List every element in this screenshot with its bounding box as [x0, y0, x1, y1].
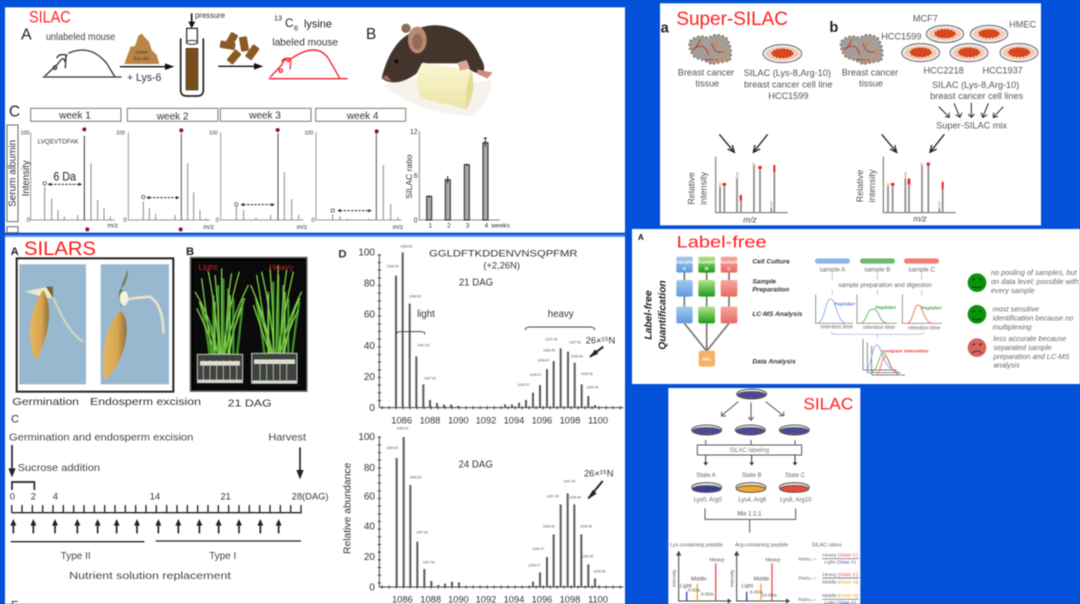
bar chart: SILAC ratio: 0	[414, 218, 418, 225]
SILAC ratio formulas: Middle (State B)	[822, 593, 858, 599]
rotated title: Label-free Quantification: Label-free	[644, 290, 655, 340]
photo captions	[12, 397, 272, 409]
pros and cons text: separated sample	[993, 343, 1052, 352]
photo captions: Germination	[12, 397, 79, 408]
heading: Label-free: Label-free	[677, 233, 767, 252]
unlabeled mouse: unlabeled mouse	[46, 32, 115, 43]
spectrum 24 DAG: 1096.96	[543, 525, 555, 529]
spectrum 21 DAG: 1097.96	[569, 340, 581, 344]
week header boxes	[31, 108, 406, 122]
spectrum 21 DAG: 100	[358, 248, 375, 259]
unlabeled dishes	[692, 389, 809, 435]
row label: Serum albumin	[7, 125, 19, 233]
split arrows	[722, 402, 784, 420]
spectrum b: m/z	[913, 214, 928, 224]
column titles: SILAC ratios	[812, 542, 842, 548]
spectrum week 1: Intensity	[21, 160, 32, 196]
spectrum week 4	[304, 129, 403, 231]
spectrum 21 DAG: 1098.96	[581, 372, 593, 376]
week header boxes: week 1	[58, 111, 91, 122]
Arg chart: 10.0Da	[762, 593, 777, 598]
Lys chart: Light	[680, 584, 692, 590]
pros and cons text: no pooling of samples, but	[991, 268, 1078, 277]
spectrum 24 DAG: 1096.47	[532, 547, 544, 551]
spectrum 24 DAG: 1098.46	[569, 495, 581, 499]
Lys chart: 4.0Da	[688, 588, 701, 593]
spectrum b: Relative	[855, 170, 865, 202]
spectrum week 1: 6 Da	[53, 171, 76, 184]
13C6 lysine label: 13	[274, 14, 282, 23]
sample discs: sample preparation and digestion	[838, 282, 932, 289]
sample labels: Breast cancer	[842, 68, 898, 78]
SILAC ratio formulas	[798, 552, 859, 604]
bar chart: SILAC ratio: SILAC ratio	[404, 154, 414, 199]
SILAC labeling box: SILAC labeling	[730, 448, 769, 454]
spectrum 24 DAG: 1098.96	[580, 525, 592, 529]
Lys chart: Heavy	[709, 558, 725, 564]
spectrum 24 DAG: 1086.00	[396, 426, 408, 430]
Lys chart: Middle	[691, 576, 707, 582]
panel label C: C	[9, 104, 20, 121]
timeline chart: Type II	[61, 551, 91, 562]
spectrum 21 DAG: 1087.00	[417, 344, 429, 348]
week header boxes: week 3	[248, 111, 281, 122]
spectrum week 2: m/z	[203, 224, 214, 231]
panel label A: A	[638, 233, 644, 242]
SILAC ratio formulas: Ratio₂ =	[798, 575, 816, 581]
panel label B: B	[366, 26, 376, 43]
spectrum 24 DAG: 40	[364, 522, 375, 533]
column titles	[670, 542, 842, 548]
spectrum 21 DAG: 1092	[476, 415, 496, 425]
13C6 lysine label: 6	[294, 24, 298, 33]
spectrum 21 DAG: 1096.47	[538, 359, 550, 363]
sample labels: breast cancer cell lines	[930, 91, 1024, 101]
spectrum a: Relative	[687, 172, 697, 205]
bar chart: SILAC ratio: 3	[466, 223, 470, 230]
panel label A: A	[11, 246, 19, 258]
sample labels: Breast cancer	[678, 68, 734, 78]
LC-MS retention time curves: retention time	[821, 324, 853, 330]
arrow with + Lys-6	[120, 63, 174, 84]
spectrum week 1: LVQEVTDFAK	[38, 138, 79, 145]
spectrum 21 DAG: 1086.00	[400, 244, 412, 248]
sample labels: HCC1599	[881, 31, 921, 41]
panel label B: B	[186, 246, 194, 258]
spectrum 21 DAG: 1095.47	[518, 383, 530, 387]
heading: SILAC: SILAC	[803, 394, 853, 413]
mouse photo	[382, 24, 493, 116]
unlabeled mouse	[43, 32, 122, 77]
labeled states: Lys4, Arg6	[738, 498, 767, 504]
pros and cons text: identification because no	[993, 313, 1073, 322]
labeled states	[692, 473, 812, 504]
spectrum week 3: m/z	[297, 224, 307, 231]
SILAC ratio formulas: Middle (State B)	[822, 580, 858, 586]
SILAC ratio formulas: Ratio₁ =	[798, 557, 816, 563]
workflow diagram: Mix	[703, 356, 711, 362]
workflow step labels: LC-MS Analysis	[752, 311, 803, 318]
bar chart: SILAC ratio: 4	[484, 223, 488, 230]
photo captions: Endosperm excision	[90, 397, 201, 408]
spectrum week 4: 0	[311, 218, 315, 224]
spectrum a	[687, 157, 788, 224]
rotated title: Label-free Quantification	[644, 280, 669, 350]
sample labels: tissue	[859, 79, 883, 89]
pros and cons text: analysis	[993, 361, 1020, 370]
spectrum a: intensity	[699, 171, 709, 205]
spectrum week 2: 0	[123, 218, 127, 224]
spectrum 21 DAG: 1088	[420, 415, 440, 425]
spectrum 21 DAG: 1096	[532, 415, 552, 425]
pros and cons text	[991, 268, 1079, 370]
spectrum 21 DAG: 1090	[448, 415, 469, 425]
food pellets	[219, 32, 260, 65]
spectrum 24 DAG: 1095.97	[528, 563, 540, 567]
bar chart: SILAC ratio: weeks	[490, 223, 511, 230]
pros and cons text: preparation and LC-MS	[992, 352, 1070, 361]
spectrum 24 DAG: 80	[364, 463, 375, 474]
Arg chart: 6.0Da	[750, 589, 763, 594]
spectrum 24 DAG: 20	[364, 552, 375, 563]
spectrum week 4: 100	[304, 130, 313, 136]
sample discs: sample A	[819, 266, 846, 273]
Arg chart: Heavy	[765, 558, 781, 564]
spectrum 24 DAG: 24 DAG	[458, 460, 493, 471]
SILAC ratio formulas: Ratio₃ =	[798, 597, 816, 603]
timeline chart: Germination and endosperm excision	[9, 432, 193, 443]
Lys chart	[672, 551, 732, 604]
timeline chart: 28(DAG)	[292, 491, 328, 501]
pressure column: pressure	[195, 10, 225, 20]
spectrum 24 DAG: Relative abundance	[343, 462, 354, 554]
bar chart: SILAC ratio	[404, 129, 511, 230]
spectrum 21 DAG: 26×¹⁵N	[586, 335, 615, 345]
sample labels: Super-SILAC mix	[936, 120, 1007, 130]
heading: SILARS: SILARS	[24, 239, 96, 260]
rice seedling photo: Heavy	[269, 262, 294, 272]
sample labels: SILAC (Lys-8,Arg-10)	[744, 68, 831, 78]
pros and cons text: multiplexing	[993, 322, 1032, 331]
overlay compare chart	[863, 339, 929, 375]
lysine free diet pile	[124, 33, 159, 64]
spectrum 21 DAG: 1086	[391, 415, 412, 425]
SILAC ratio formulas: Heavy (State C)	[822, 552, 858, 558]
spectrum 24 DAG: 1097.46	[547, 495, 559, 499]
sample discs: sample B	[864, 266, 891, 273]
spectrum 21 DAG: 1099.46	[586, 385, 598, 389]
sample labels: HCC1599	[768, 91, 808, 101]
spectrum 21 DAG: 1086.50	[409, 294, 421, 298]
workflow diagram: C	[727, 266, 731, 272]
spectrum 21 DAG: 20	[364, 372, 375, 383]
spectrum 21 DAG: 21 DAG	[459, 278, 493, 289]
panel label D and peptide title: GGLDFTKDDENVNSQPFMR	[429, 248, 578, 258]
labeled states: State B	[742, 473, 761, 479]
germination photo frame	[17, 258, 173, 392]
pros and cons text: every sample	[991, 286, 1035, 295]
timeline chart: 2	[31, 491, 36, 501]
smileys	[968, 273, 986, 357]
13C6 lysine label	[272, 14, 338, 49]
spectrum b: intensity	[867, 169, 877, 202]
timeline chart: 0	[10, 491, 15, 501]
spectrum 24 DAG: 1099.46	[581, 554, 593, 558]
rice seedling photo	[191, 258, 307, 391]
week header boxes: week 4	[346, 111, 379, 122]
labeled states: Lys0, Arg0	[694, 498, 722, 504]
column titles: Lys-containing peptide	[670, 542, 723, 548]
breast cancer tissue a	[689, 35, 731, 64]
timeline chart: 21	[220, 491, 231, 501]
lower spectra markers	[85, 227, 183, 231]
spectrum 21 DAG: heavy	[548, 309, 574, 320]
Lys chart: 8.0Da	[701, 591, 714, 596]
workflow step labels: Preparation	[752, 287, 789, 294]
workflow step labels: Sample	[752, 279, 776, 286]
sample labels: MCF7	[913, 14, 938, 24]
spectrum week 3	[209, 128, 307, 231]
SILAC ratio formulas: Light (State A)	[824, 560, 856, 566]
spectrum week 3: 0	[216, 218, 220, 224]
spectrum 24 DAG: 1087.50	[423, 560, 435, 564]
lysine free diet pile: free diet	[134, 56, 150, 61]
culture dishes	[763, 25, 1038, 63]
sample labels: breast cancer cell line	[744, 80, 833, 90]
timeline chart: 14	[150, 491, 160, 501]
spectrum 24 DAG: 1087.00	[416, 530, 428, 534]
bar chart: SILAC ratio: 1	[428, 223, 432, 230]
heading: SILAC: SILAC	[29, 8, 71, 27]
13C6 lysine label: lysine	[304, 18, 332, 30]
spectrum 24 DAG: 0	[369, 582, 375, 593]
spectrum 21 DAG: 1095.97	[529, 373, 541, 377]
spectrum a: m/z	[743, 214, 758, 224]
panel: SILARS mass spectra	[338, 244, 623, 604]
spectrum 24 DAG: 1085.50	[386, 446, 398, 450]
Arg chart: Light	[742, 584, 754, 590]
labeled states: State C	[785, 473, 806, 479]
lysine free diet pile: Lysine	[135, 49, 148, 54]
LC-MS retention time curves: Peptide#	[921, 306, 942, 312]
spectrum 24 DAG: 26×¹⁵N	[584, 469, 614, 479]
spectrum 21 DAG: 1098.46	[571, 354, 583, 358]
spectrum 21 DAG: 1098	[560, 415, 580, 425]
column titles: Arg-containing peptide	[735, 542, 788, 548]
spectrum week 1: 100	[20, 130, 29, 136]
spectrum week 2	[116, 128, 214, 231]
bar chart: SILAC ratio: 6	[414, 173, 418, 180]
labels a and b: a	[661, 20, 670, 36]
13C6 lysine label: C	[285, 17, 293, 30]
panel: SILAC workflow	[668, 388, 860, 604]
spectrum 24 DAG: 1097.96	[563, 479, 575, 483]
mix bracket	[705, 508, 796, 533]
LC-MS retention time curves: Peptide#	[834, 302, 855, 308]
spectrum 21 DAG: 1100	[588, 415, 608, 425]
SILAC ratio formulas: Heavy (State C)	[822, 572, 858, 578]
sample discs	[815, 258, 939, 295]
timeline chart: Nutrient solution replacement	[69, 571, 231, 582]
spectrum week 2: 100	[116, 130, 125, 136]
panel: SILAC mouse labeling	[5, 7, 625, 233]
Arg chart: Intensity	[730, 569, 735, 587]
panel label A: A	[21, 26, 32, 43]
bar chart: SILAC ratio: 2	[447, 223, 451, 230]
rotated title: Label-free Quantification: Quantification	[658, 280, 669, 350]
workflow diagram	[675, 257, 738, 367]
sample labels: HCC1937	[983, 66, 1023, 76]
Arg chart	[730, 551, 790, 604]
week header boxes: week 2	[156, 111, 189, 122]
LC-MS retention time curves: retention time	[908, 325, 941, 331]
spectrum 21 DAG: 0	[369, 403, 375, 414]
spectrum 21 DAG: 1097.46	[545, 338, 557, 342]
labeled states: Lys8, Arg10	[780, 498, 812, 504]
panel label D and peptide title	[338, 248, 578, 270]
panel label D and peptide title: (+2,26N)	[483, 260, 520, 270]
workflow diagram: Sample	[698, 259, 716, 265]
panel label C: C	[11, 414, 19, 426]
spectrum 24 DAG	[343, 426, 623, 604]
timeline chart: Harvest	[268, 432, 306, 443]
mix bracket: Mix 1:1:1	[737, 512, 762, 518]
sample labels: HMEC	[1009, 20, 1037, 30]
workflow step labels: Cell Culture	[752, 259, 790, 266]
pros and cons text: on data level; possible with	[991, 277, 1079, 286]
arrow to labeled mouse	[218, 63, 263, 70]
bar chart: SILAC ratio: 12	[410, 129, 418, 136]
workflow diagram: A	[683, 266, 687, 272]
LC-MS retention time curves	[816, 294, 942, 338]
overlay compare chart: compare intensities	[882, 348, 929, 354]
spectrum week 3: 100	[209, 130, 218, 136]
LC-MS retention time curves: retention time	[863, 325, 895, 331]
row label: Serum albumin: Serum albumin	[8, 140, 19, 207]
photo captions: 21 DAG	[228, 398, 272, 409]
sample labels: SILAC (Lys-8,Arg-10)	[932, 80, 1019, 90]
spectrum week 1: 0	[27, 218, 31, 224]
spectrum week 4: m/z	[393, 224, 403, 231]
spectrum 21 DAG: 1096.96	[543, 349, 555, 353]
sample labels	[678, 14, 1037, 130]
spectrum week 1	[20, 127, 118, 229]
SILAC labeling box	[697, 440, 802, 466]
timeline chart	[8, 432, 328, 582]
labeled states: State A	[696, 473, 716, 479]
panel: Label-free	[632, 229, 1080, 384]
panel label D and peptide title: D	[338, 249, 347, 261]
workflow step labels: Data Analysis	[752, 358, 796, 365]
spectrum 24 DAG: 1099.96	[593, 570, 605, 574]
timeline chart: Sucrose addition	[18, 463, 100, 474]
labels a and b	[661, 20, 838, 36]
heading: Super-SILAC: Super-SILAC	[676, 9, 788, 30]
spectrum 24 DAG: 60	[364, 492, 375, 503]
sample labels: HCC2218	[924, 66, 964, 76]
spectrum 21 DAG: 1085.50	[387, 265, 399, 269]
panel: Super-SILAC	[660, 3, 1041, 225]
pros and cons text: less accurate because	[993, 334, 1066, 343]
spectrum 21 DAG: 1094	[504, 415, 524, 425]
pressure column	[181, 10, 225, 96]
spectrum 21 DAG: 1087.50	[424, 376, 436, 380]
spectrum 24 DAG: 100	[358, 432, 375, 443]
spectrum 24 DAG: 1086.50	[409, 475, 421, 479]
sample discs: sample C	[908, 266, 935, 273]
spectrum 21 DAG: 60	[364, 310, 375, 321]
13C6 lysine label: labeled mouse	[272, 38, 338, 49]
spectrum week 1: m/z	[107, 222, 118, 229]
Arg chart: Middle	[754, 576, 769, 582]
spectrum 21 DAG: 80	[364, 278, 375, 289]
spectrum b	[855, 157, 956, 224]
breast cancer tissue b	[841, 35, 882, 64]
spectrum 21 DAG: 40	[364, 341, 375, 352]
workflow diagram: Sample	[720, 259, 738, 265]
workflow diagram: Sample	[675, 259, 693, 265]
timeline chart: Type I	[209, 551, 236, 562]
panel: SILARS	[5, 235, 625, 604]
workflow step labels	[752, 259, 803, 365]
red labeled mouse	[269, 50, 348, 79]
Lys chart: Intensity	[672, 569, 677, 587]
workflow diagram: B	[705, 266, 709, 272]
spectrum 21 DAG: light	[417, 309, 435, 320]
LC-MS retention time curves: Peptide#	[875, 305, 896, 311]
spectrum 21 DAG	[358, 244, 623, 425]
pros and cons text: most sensitive	[993, 304, 1039, 313]
arrows into spectra	[719, 134, 944, 152]
timeline chart: 4	[53, 491, 58, 501]
labels a and b: b	[829, 20, 838, 36]
arrow with + Lys-6: + Lys-6	[127, 72, 161, 84]
rice seedling photo: Light	[198, 262, 218, 272]
sample labels: tissue	[695, 79, 719, 89]
mix arrows	[939, 103, 1003, 117]
